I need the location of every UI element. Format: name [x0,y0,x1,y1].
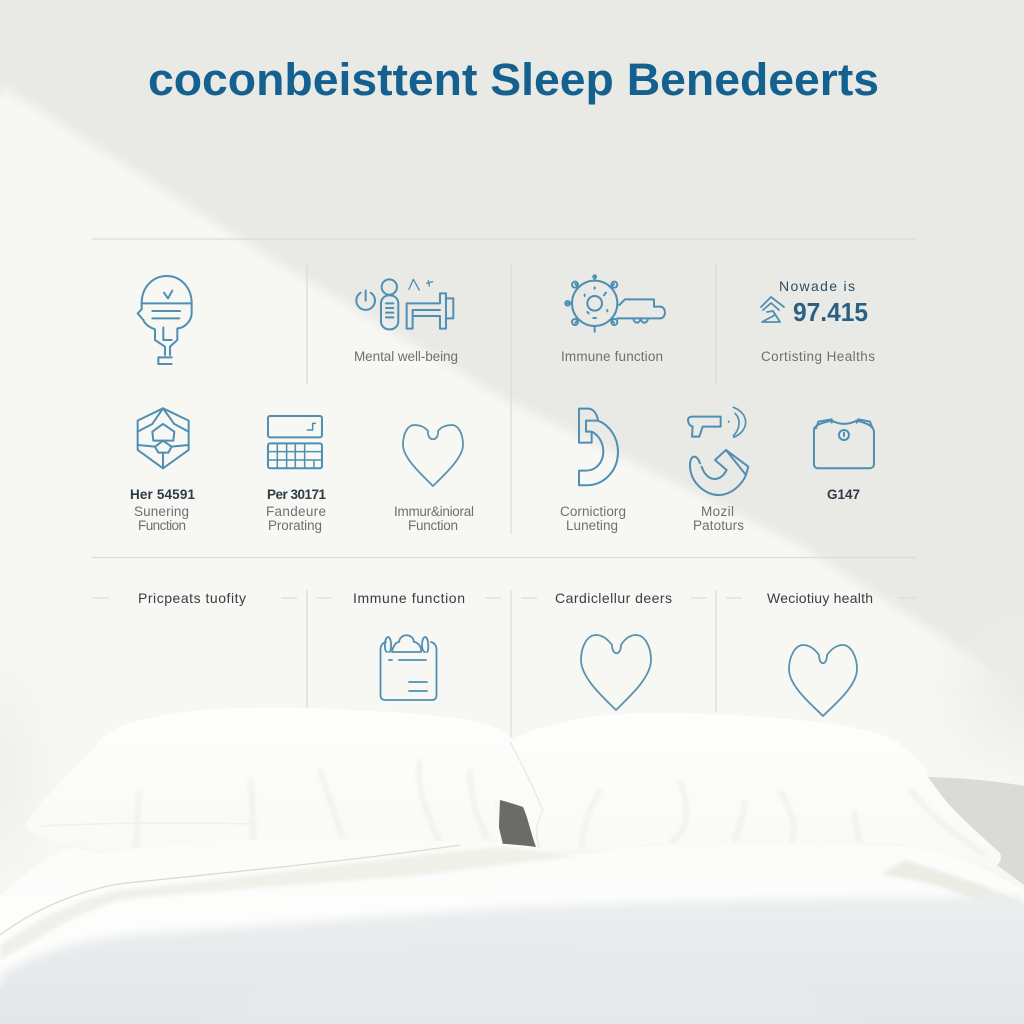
panel: crescent item [560,409,626,533]
label lines: Sunering [134,504,189,519]
icon: house [761,297,784,322]
panel: health lower [767,590,873,716]
panel: immune function lower [353,590,465,700]
heading: Immune function [353,590,465,606]
panel: battery item [814,419,874,502]
bed illustration [0,708,1024,1024]
grid dividers [92,239,916,738]
label: Cortisting Healths [761,349,875,364]
panel: cardiocellular lower [555,590,672,710]
label lines: Fandeure [266,504,326,519]
panel: heart item: Function [408,518,458,533]
icon: hexagon [138,408,189,468]
stat number: 97.415 [793,297,868,327]
panel: device item [688,407,748,533]
icon: person and bed [356,279,453,329]
icon: keypad [268,416,322,468]
panel: heart item [394,425,474,533]
wall shadow right of pillow [928,777,1024,885]
icon: case [814,419,874,468]
heading: Weciotiuy health [767,590,873,606]
icon: heart [789,645,857,716]
label lines: Immur&inioral [394,504,474,519]
left pillow [26,708,514,851]
label: Her 54591 [130,487,195,502]
panel: keypad item: Prorating [268,518,322,533]
panel: mental well-being [354,279,458,364]
icon: device and hook [688,407,748,495]
panel: hexagon item [130,408,195,533]
icon: head with brain cap [138,276,192,364]
label: Immune function [561,349,663,364]
icon: heart [403,425,463,486]
stat heading: Nowade is [779,278,855,294]
panel: device item: Patoturs [693,518,744,533]
heading: Cardiclellur deers [555,590,672,606]
panel: statistic [761,278,875,364]
right pillow [488,713,1001,867]
panel: crescent item: Luneting [566,518,618,533]
label: Per 30171 [267,487,326,502]
icon: heart [581,635,651,710]
panel: hexagon item: Function [138,518,186,533]
icon: immune cell and capsule [565,275,665,332]
heading: pricpeats tuofity: Pricpeats tuofity [138,590,246,606]
label lines: Mozil [701,504,734,519]
title: coconbeisttent Sleep Benedeerts [148,54,879,105]
gap between pillows [498,800,540,850]
icon: clipboard [380,635,436,700]
duvet [0,839,1024,1024]
panel: keypad item [266,416,326,533]
label: Mental well-being [354,349,458,364]
icon: crescent [579,409,618,485]
label lines: Cornictiorg [560,504,626,519]
label: G147 [827,487,860,502]
panel: immune function [561,275,665,364]
